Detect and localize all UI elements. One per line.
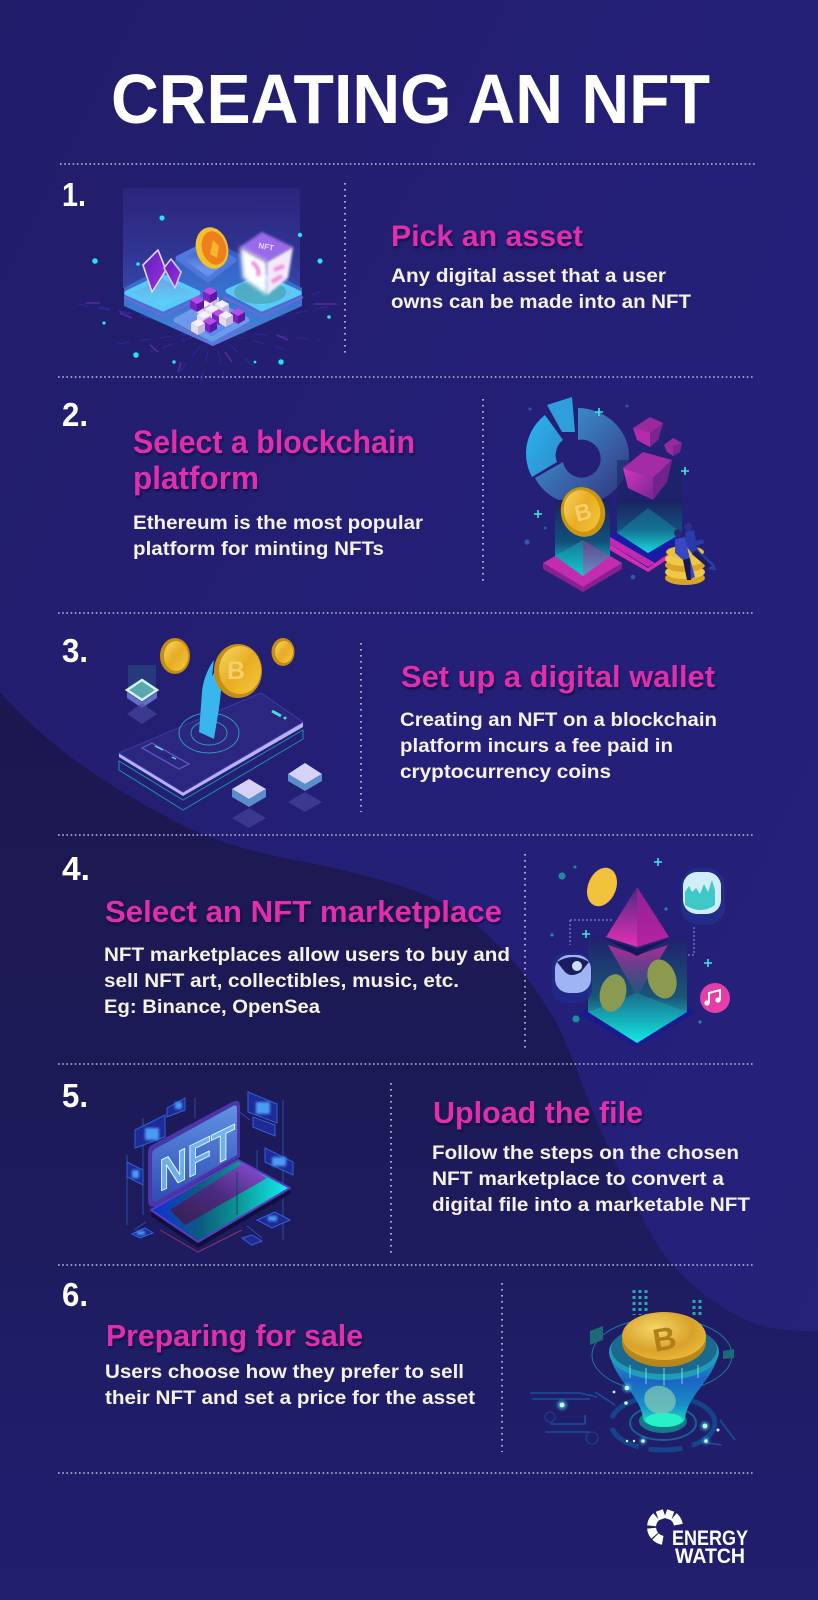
description [400, 710, 717, 783]
panel: step 3 [62, 632, 717, 828]
panel: step 4 [62, 850, 730, 1050]
heading: Preparing for sale [106, 1318, 363, 1353]
logo: Energy Watch [652, 1514, 748, 1568]
description [104, 945, 510, 1018]
panel: step 5 [62, 1077, 750, 1253]
description: NFT marketplace to convert a [432, 1169, 724, 1190]
description: platform incurs a fee paid in [400, 736, 673, 757]
heading: Select a blockchain [133, 424, 415, 460]
step number 1: 1. [62, 176, 86, 213]
description: Creating an NFT on a blockchain [400, 710, 717, 731]
illustration: isometric asset platform [78, 188, 340, 385]
description: Eg: Binance, OpenSea [104, 997, 320, 1018]
illustration: wallet phone with coins: B [227, 657, 245, 685]
description: Ethereum is the most popular [133, 513, 424, 534]
heading: Upload the file [433, 1095, 643, 1130]
description: cryptocurrency coins [400, 762, 611, 783]
heading: Pick an asset [391, 220, 583, 253]
panel: step 6 [62, 1276, 735, 1452]
logo: Energy Watch: ENERGY [672, 1527, 748, 1550]
step number 6: 6. [62, 1276, 88, 1313]
description: Follow the steps on the chosen [432, 1143, 739, 1164]
illustration: blockchain charts and coin: B [572, 497, 594, 527]
description: Users choose how they prefer to sell [105, 1362, 464, 1383]
panel: step 1 [62, 176, 691, 385]
description: owns can be made into an NFT [391, 292, 691, 313]
logo ring [652, 1514, 678, 1540]
panel: step 2 [62, 396, 716, 592]
illustration: NFT laptop: NFT [159, 1115, 235, 1202]
description: Any digital asset that a user [391, 266, 667, 287]
title: CREATING AN NFT [111, 60, 710, 138]
illustration: wallet phone with coins [119, 638, 322, 828]
step number 4: 4. [62, 850, 90, 887]
step number 5: 5. [62, 1077, 88, 1114]
logo: Energy Watch: WATCH [675, 1545, 745, 1568]
description: platform for minting NFTs [133, 539, 384, 560]
illustration: isometric asset platform: NFT [258, 241, 275, 253]
description: sell NFT art, collectibles, music, etc. [104, 971, 459, 992]
description [133, 513, 424, 560]
illustration: wallet phone with coins: B [171, 649, 182, 666]
illustration: gold coin funnel [530, 1290, 735, 1450]
illustration: NFT laptop [127, 1092, 293, 1252]
step number 2: 2. [62, 396, 88, 433]
step number 3: 3. [62, 632, 88, 669]
heading: platform [133, 460, 259, 496]
description [432, 1143, 750, 1216]
description [391, 266, 691, 313]
description [105, 1362, 476, 1409]
illustration: blockchain charts and coin [524, 397, 716, 592]
illustration: wallet phone with coins: B [280, 647, 288, 659]
heading: Set up a digital wallet [401, 659, 715, 694]
illustration: ethereum crystal and collectibles [550, 858, 730, 1048]
heading [133, 424, 415, 496]
heading: Select an NFT marketplace [105, 894, 502, 929]
illustration: gold coin funnel: B [650, 1319, 679, 1359]
description: their NFT and set a price for the asset [105, 1388, 476, 1409]
description: digital file into a marketable NFT [432, 1195, 750, 1216]
description: NFT marketplaces allow users to buy and [104, 945, 510, 966]
